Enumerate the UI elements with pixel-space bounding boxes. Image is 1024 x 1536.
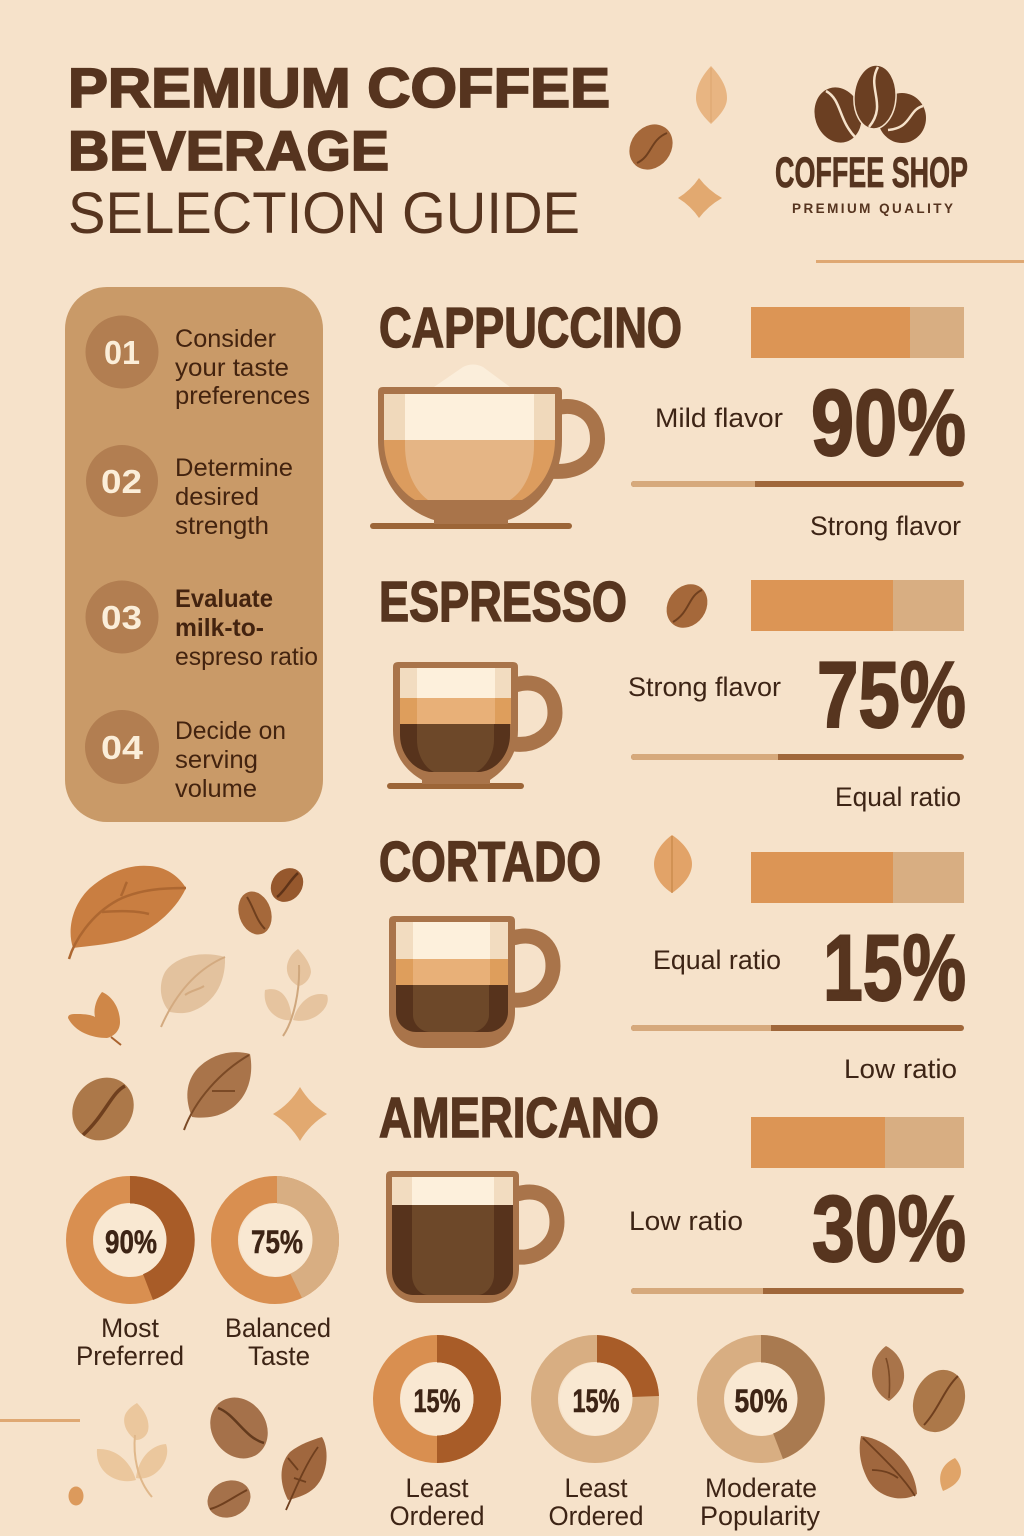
step 01: 01	[104, 334, 140, 371]
americano cup	[386, 1171, 557, 1303]
beans pair	[233, 862, 310, 939]
donut: 90% most preferred: Most	[101, 1313, 159, 1343]
step 02	[86, 445, 293, 540]
logo: PREMIUM QUALITY	[792, 201, 953, 216]
section: cappuccino: 90%	[811, 370, 966, 475]
section: americano: 30%	[812, 1176, 966, 1281]
donut: 75% balanced taste: 75%	[251, 1224, 303, 1260]
decorative leaves and beans, left column	[60, 862, 328, 1153]
cappuccino cup	[370, 364, 598, 529]
section: espresso	[379, 570, 966, 812]
section: espresso: 75%	[817, 642, 966, 747]
icon: cortado leaf	[654, 835, 692, 893]
title	[68, 56, 610, 246]
leaf	[860, 1436, 917, 1498]
strength slider	[631, 754, 964, 760]
americano ratio bar	[751, 1117, 964, 1168]
title: BEVERAGE	[68, 119, 389, 182]
section: americano: AMERICANO	[379, 1086, 659, 1150]
step 03: Evaluate	[175, 585, 273, 613]
section: cortado	[379, 830, 966, 1084]
step 01: Consider	[175, 325, 276, 353]
ratio slider	[631, 1025, 964, 1031]
brown leaf	[184, 1052, 251, 1130]
section: cappuccino	[370, 296, 966, 541]
step 03: 03	[101, 599, 142, 636]
donut: 50% moderate popularity	[700, 1335, 825, 1531]
section: cortado: CORTADO	[379, 830, 601, 894]
section: cappuccino: CAPPUCCINO	[379, 296, 682, 360]
step 03: espreso ratio	[175, 643, 318, 671]
section: cortado: 15%	[823, 915, 966, 1020]
cappuccino ratio bar	[751, 307, 964, 358]
sprig	[97, 1403, 167, 1497]
pale leaf	[161, 954, 225, 1027]
sparkle	[273, 1087, 327, 1141]
section: cortado: Equal ratio	[653, 945, 781, 975]
step 01: your taste	[175, 354, 289, 382]
donut: 15% least ordered, tan	[544, 1335, 659, 1531]
donut: 15% least ordered, tan: Ordered	[548, 1501, 644, 1531]
step 02: desired	[175, 483, 259, 511]
step 02: strength	[175, 512, 269, 540]
section: cappuccino: Strong flavor	[810, 511, 961, 541]
panel: selection steps	[65, 287, 323, 822]
donut: 75% balanced taste: Taste	[248, 1341, 310, 1371]
step 04: volume	[175, 775, 257, 803]
leaf	[282, 1437, 327, 1510]
large orange leaf	[69, 866, 186, 959]
title: PREMIUM COFFEE	[68, 56, 610, 119]
narrow leaf	[872, 1346, 904, 1401]
americano slider	[631, 1288, 964, 1294]
decorative leaves and beans, bottom left	[68, 1386, 327, 1524]
section: cortado: Low ratio	[844, 1054, 957, 1084]
donut: 15% least ordered: 15%	[414, 1383, 460, 1419]
donut: 15% least ordered, tan: Least	[564, 1473, 628, 1503]
small orange leaf	[68, 992, 121, 1045]
step 03: milk-to-	[175, 614, 264, 642]
espresso cup	[387, 662, 555, 789]
section: espresso: Strong flavor	[628, 672, 781, 702]
step 01	[86, 316, 310, 410]
donut: 15% least ordered: Ordered	[390, 1501, 484, 1531]
cortado ratio bar	[751, 852, 964, 903]
donut: 75% balanced taste	[224, 1176, 339, 1371]
section: americano: Low ratio	[629, 1206, 743, 1236]
donut: 75% balanced taste: Balanced	[225, 1313, 331, 1343]
donut: 15% least ordered: Least	[406, 1473, 469, 1503]
title: SELECTION GUIDE	[68, 181, 580, 246]
section: espresso: ESPRESSO	[379, 570, 627, 634]
donut: 50% moderate popularity: 50%	[734, 1383, 788, 1419]
drop	[68, 1486, 84, 1506]
flavor slider	[631, 481, 964, 487]
step 04: Decide on	[175, 717, 286, 745]
icon: top sparkle	[678, 178, 722, 218]
icon: top leaf	[696, 66, 727, 124]
bean	[904, 1362, 974, 1440]
section: espresso: Equal ratio	[835, 782, 961, 812]
donut: 90% most preferred: Preferred	[76, 1341, 184, 1371]
bean large	[60, 1065, 146, 1153]
cortado cup	[389, 916, 553, 1048]
icon: top bean	[620, 116, 682, 178]
icon: espresso bean	[658, 576, 716, 636]
drop	[940, 1458, 961, 1491]
step 04: 04	[101, 729, 144, 766]
logo beans	[807, 64, 926, 149]
donut: 50% moderate popularity: Popularity	[700, 1501, 820, 1531]
bean small	[202, 1474, 256, 1524]
donut: 90% most preferred	[76, 1176, 195, 1371]
bean	[199, 1386, 279, 1470]
step 04: serving	[175, 746, 258, 774]
section: cappuccino: Mild flavor	[655, 403, 783, 433]
decorative leaves and beans, bottom right	[860, 1346, 974, 1498]
step 03	[86, 580, 318, 671]
donut: 50% moderate popularity: Moderate	[705, 1473, 817, 1503]
section: americano	[379, 1086, 966, 1303]
step 02: 02	[101, 463, 142, 500]
donut: 15% least ordered, tan: 15%	[572, 1383, 620, 1419]
pale sprig	[265, 949, 328, 1036]
espresso ratio bar	[751, 580, 964, 631]
step 01: preferences	[175, 382, 310, 410]
donut: 90% most preferred: 90%	[105, 1224, 157, 1260]
step 02: Determine	[175, 454, 293, 482]
logo	[775, 64, 968, 216]
donut: 15% least ordered	[386, 1335, 501, 1531]
step 04	[85, 710, 286, 803]
